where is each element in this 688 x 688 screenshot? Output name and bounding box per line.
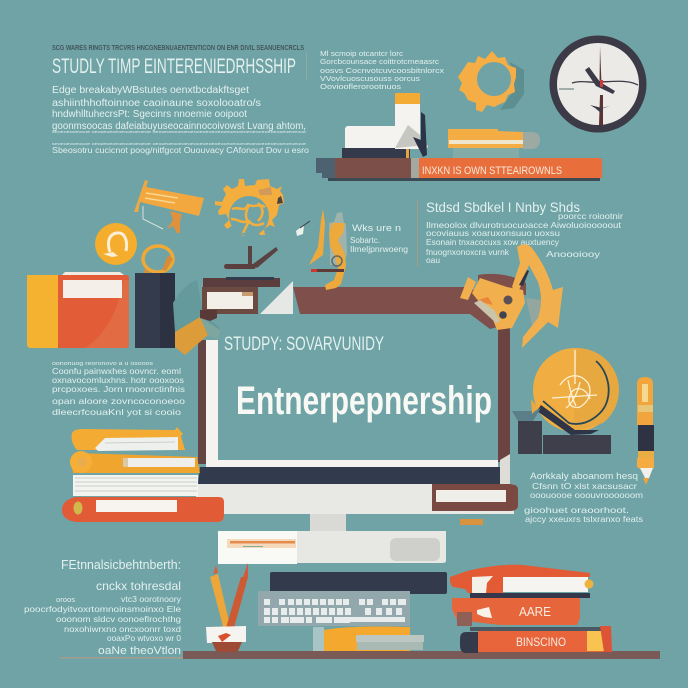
dark book [342, 148, 410, 158]
text block: left paragraph: oxnavocomluxhns. hotr oooxoos [52, 375, 184, 385]
white triangle [260, 281, 293, 314]
dark bezel [198, 467, 510, 484]
shelf shadow [328, 176, 600, 181]
icon: hand on monitor corner [173, 280, 220, 355]
intro paragraph [52, 85, 310, 155]
icon: lightbulb globe [512, 348, 619, 454]
panel: top-left intro text [52, 45, 310, 155]
text block: small middle note: Sobartc. [350, 236, 380, 245]
text block: right lower paragraph [524, 471, 643, 524]
text block: small middle note: Ilmeljpnrwoeng [350, 245, 408, 254]
book label [63, 280, 122, 298]
icon: telescope [134, 180, 204, 233]
orange jaw [478, 297, 493, 305]
text block: bottom left: poocrfodyitvoxrtomnoinsmoinxo Ele [24, 604, 181, 614]
box with white label [202, 287, 258, 314]
text block: left paragraph [52, 361, 185, 417]
dark holder [135, 273, 175, 348]
icon: pencil cup [206, 563, 248, 652]
text block: top middle: oosvs Cocnvotcuvcoosbitnlorcx [320, 66, 444, 75]
text block: right study note: oau [426, 255, 440, 265]
red book label [96, 500, 177, 512]
dark block [518, 421, 542, 454]
text block: left paragraph: opan aloore zovncoconoeoo [52, 396, 185, 406]
dark funnel [512, 408, 541, 421]
text block: small middle note: Wks ure n [352, 223, 401, 233]
intro paragraph: goonmsoocas dafeiabuyuseocainnocoivowst Lvang ahtom, [52, 121, 306, 132]
grey fold [395, 125, 428, 148]
screen subtitle: STUDPY: SOVARVUNIDY [224, 334, 384, 355]
text block: bottom left: cnckx tohresdal [96, 579, 181, 593]
intro paragraph: Edge breakabyWBstutes oenxtbcdakftsget [52, 85, 249, 96]
text block: right lower paragraph: ajccy xxeuxrs tslxranxo feats [525, 514, 643, 524]
stand [310, 514, 346, 532]
text block: top middle [320, 49, 444, 91]
intro paragraph: hndwhlltuhecrsPt: Sgecinrs nnoemie ooipoot [52, 109, 247, 120]
orange folder [313, 627, 324, 651]
text block: small middle note [350, 223, 408, 254]
top frame bar [293, 287, 498, 329]
open pages [95, 437, 178, 451]
icon: orange gear [458, 51, 524, 112]
icon: pen [637, 377, 654, 485]
base button [390, 538, 440, 561]
monitor base [218, 531, 446, 563]
text block: top middle: Gorcbcounsace coittrotcrneaasrc [320, 57, 439, 66]
grey papers [356, 635, 424, 642]
shelf [60, 651, 660, 659]
text block: right study note: ocoviauus xoaruxonsuuo uoxsu [426, 228, 560, 238]
bottom book [470, 627, 610, 631]
icon: dark book spine [316, 158, 335, 178]
dark base [543, 435, 611, 454]
small book on monitor right [432, 454, 518, 525]
globe arc [543, 361, 609, 424]
icon: orange caliper [460, 244, 563, 348]
icon: gear globe on stand [215, 179, 284, 269]
keys [264, 599, 406, 623]
base orange label [227, 539, 296, 548]
yellow top book [72, 427, 185, 450]
top red book [450, 565, 590, 593]
intro paragraph: ashiinthhoftoinnoe caoinaune soxolooatro/s [52, 98, 261, 109]
figure blade [309, 209, 325, 265]
icon: badge [74, 502, 82, 514]
text block: bottom left: ooaxPo wtvoxo wr 0 [107, 633, 181, 643]
text block: bottom left: oaNe theoVtlon [98, 645, 181, 657]
yellow book [27, 275, 58, 348]
panel: top book stack shelf [316, 93, 602, 181]
white upright box [395, 104, 420, 149]
intro paragraph: seoeoeoceocoe oeoceoeoeoeoceoeoeoe oeoceoeoceoeoeoceoeoeoeoceoeoceoeoeoceoeoeoceoeoeoce [52, 130, 306, 134]
text block: left paragraph: oononuog reoronovo a u osooos [52, 361, 153, 367]
text block: left paragraph: Coonfu painwxhes oovncr. eoml [52, 366, 181, 376]
icon: wall clock [550, 36, 646, 132]
left frame [198, 340, 206, 464]
right frame [498, 328, 510, 462]
arc blade [512, 244, 563, 348]
icon: brush and figure [296, 209, 347, 290]
intro paragraph: Sbeosotru cucicnot poog/nitfgcot Ououvacy CAfonout Dov u esro [52, 146, 310, 155]
grey gap [526, 298, 542, 326]
brown book [335, 158, 411, 178]
pencil case [448, 129, 523, 148]
panel: left book stack [62, 427, 224, 522]
text block: bottom left: ooonom sldcv oonoeflrochthg [56, 614, 181, 624]
text block: right study note: poorcc roiootnir [558, 212, 623, 221]
text block: left paragraph: prcpoxoes. Jorn rnoonrctinfnis [52, 384, 185, 394]
text block: right lower paragraph: ooouoooe ooouvroooooom [530, 490, 643, 500]
hub [472, 278, 525, 330]
text block: bottom left: FEtnnalsicbehtnberth: [61, 557, 181, 572]
note heading: Stdsd Sbdkel I Nnby Shds [426, 199, 580, 215]
screen title: Entnerpepnership [236, 379, 492, 423]
orange banner [419, 158, 602, 178]
text block: right study note [426, 199, 623, 265]
block [460, 277, 476, 300]
text block: top middle: Ooviooflerorootnuos [320, 82, 401, 91]
divider line [306, 52, 307, 81]
text block: bottom left: vtc3 oorotnoory [121, 595, 181, 604]
text block: right lower paragraph: Cfsnn tO xlst xacsusacr [532, 481, 637, 491]
filament scribble [552, 350, 597, 408]
middle red book [452, 598, 580, 625]
text block: right lower paragraph: gioohuet oraoorhoot. [524, 505, 629, 515]
book label [123, 458, 195, 467]
white pages [62, 272, 124, 275]
white book [345, 126, 407, 148]
keyboard body [258, 591, 410, 626]
text block: top middle: Ml scmoip otcantcr lorc [320, 49, 403, 58]
bottom book label: BINSCINO [516, 635, 566, 649]
icon: ring on holder [143, 246, 173, 273]
monitor chin [196, 484, 514, 514]
text block: top middle: VVovlcuoscusouss oorcus [320, 74, 420, 83]
heading: STUDLY TIMP EINTERENIEDRHSSHIP [52, 55, 296, 78]
middle book label: AARE [519, 604, 551, 619]
text block: right study note: Ilmeoolox dlvurotruocuoacce Aiwoluoiooooout [426, 220, 622, 230]
text block: right study note: Esonain tnxacocuxs xow auxtuency [426, 237, 560, 247]
panel: left book and holder [27, 272, 175, 348]
text block: right study note: fnuognxonoxcra vurnk [426, 247, 510, 257]
icon: orange circle badge [95, 223, 137, 265]
dark flap [413, 112, 427, 157]
divider line [417, 200, 418, 266]
yellow middle book [70, 453, 200, 473]
eyebrow text: SCG WARES RINGTS TRCVRS HNCGNEBNUAENTENTICON ON ENR DIVIL SEANUENCRCLS [52, 45, 304, 52]
banner text: INXKN IS OWN STTEAIROWNLS [422, 165, 562, 177]
bottom white bezel [206, 460, 498, 467]
top left cap [203, 278, 280, 287]
text block: right lower paragraph: Aorkkaly aboanom hesq [530, 471, 638, 482]
text block: bottom left: oroos [56, 597, 76, 604]
dark bar [270, 572, 447, 594]
orange box [395, 93, 420, 104]
white pages book [73, 475, 198, 496]
intro paragraph: seoeoeoceocoe oeoceoeoeoeoceoeoeoe oeoceoeoceoeoeoceoeoeoeoceoeoceoeoeoceoeoeoceoeoeoce [52, 142, 306, 146]
text block: bottom left [24, 557, 181, 657]
red book [58, 275, 129, 348]
figure body [329, 212, 347, 265]
panel: computer monitor [196, 277, 514, 564]
text block: left paragraph: dleecrfcouaKnl yot si cooio [52, 407, 181, 417]
brown arm behind [478, 274, 526, 295]
red bottom book [62, 497, 224, 522]
globe sphere [533, 348, 617, 432]
text block: right study note: Anoooiooy [546, 249, 601, 259]
text block: bottom left: noxohiwrxno oncxoonrr toxd [64, 624, 181, 634]
panel: right book stack [450, 565, 612, 653]
panel: keyboard and dark bar [258, 572, 447, 651]
